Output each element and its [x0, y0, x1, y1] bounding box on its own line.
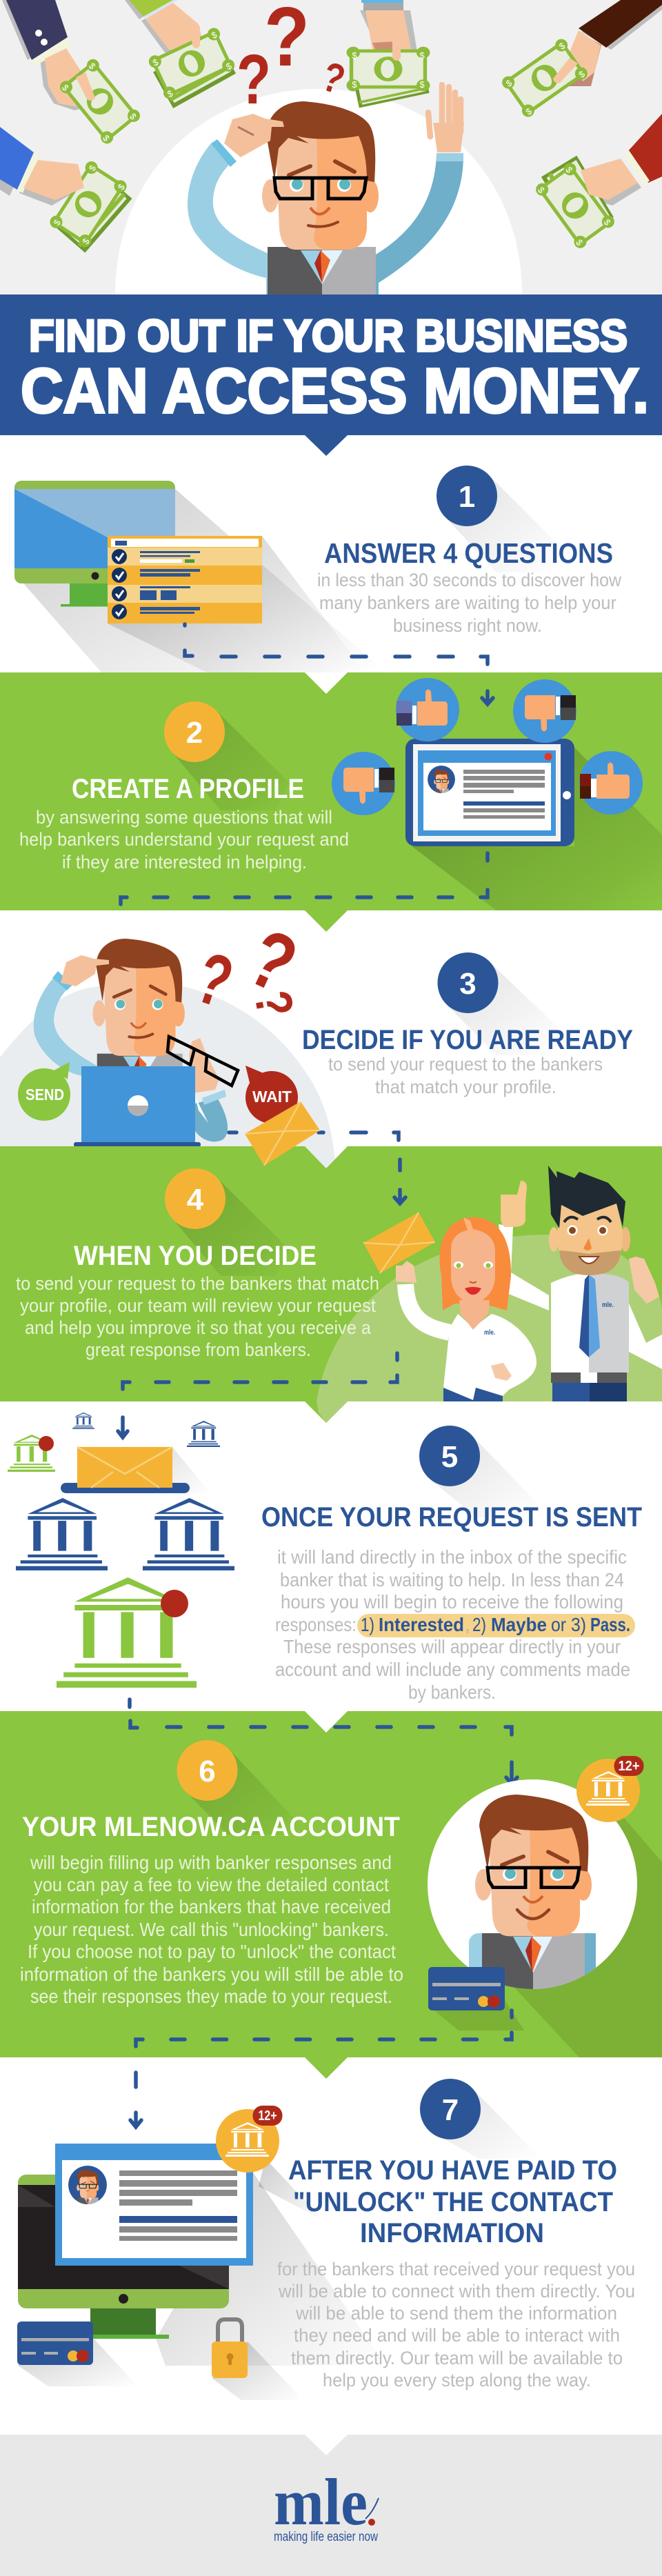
- smile: [579, 1257, 599, 1264]
- body text 7: [277, 2259, 635, 2390]
- icon: thumb up top left: [396, 678, 459, 741]
- body text 2: [19, 807, 349, 872]
- avatar: [428, 766, 455, 795]
- neck: [459, 1300, 490, 1330]
- panel: footer: [0, 2435, 662, 2576]
- body text 5: These responses will appear directly in your: [283, 1636, 621, 1657]
- icon: monitor: [18, 2175, 229, 2339]
- icon: hand top centre with bills: $: [352, 79, 357, 90]
- panel: step 5: [8, 1412, 642, 1707]
- icon: open padlock: [212, 2319, 248, 2378]
- icon: hand top right with bill: [500, 0, 662, 119]
- heading 7: [288, 2155, 617, 2248]
- body text 6: If you choose not to pay to "unlock" the contact: [28, 1941, 396, 1962]
- panel: step 1: [14, 466, 621, 672]
- body text 4: to send your request to the bankers that match: [16, 1273, 379, 1294]
- icon: hand top with bills: $: [151, 57, 161, 68]
- man at laptop: [34, 939, 238, 1147]
- highlighted responses: ,: [465, 1614, 470, 1635]
- icon: question marks: ?: [235, 912, 310, 1011]
- hands: [396, 1261, 417, 1283]
- dashed connector top: [130, 1721, 517, 1784]
- icon: hand top centre with bills: $: [419, 50, 425, 61]
- icon: hand top right with bill: $: [576, 68, 588, 80]
- number badge 7: [420, 2079, 541, 2159]
- icon: question marks: ?: [243, 986, 305, 1021]
- panel: step 7: [17, 2073, 635, 2400]
- icon: hand right with bills: $: [574, 237, 585, 248]
- bank badge: [576, 1756, 644, 1822]
- title: FIND OUT IF YOUR BUSINESS: [29, 310, 628, 361]
- icon: tablet profile: [405, 739, 574, 846]
- panel: step 6: [0, 1711, 662, 2079]
- icon: hand top with bills: [125, 0, 241, 110]
- body text 1: many bankers are waiting to help your: [319, 592, 616, 613]
- highlighted responses: 1): [361, 1614, 374, 1635]
- avatar: [68, 2166, 107, 2206]
- body text 5: banker that is waiting to help. In less than 24: [280, 1569, 624, 1590]
- body text 3: to send your request to the bankers: [328, 1054, 603, 1075]
- torso: [97, 1054, 183, 1091]
- number badge 1: [437, 466, 559, 572]
- body text 6: your request. We call this "unlocking" bankers.: [34, 1919, 389, 1940]
- icon: hand right with bills: $: [563, 165, 575, 175]
- body text 6: [20, 1852, 403, 2007]
- body text 5: hours you will begin to receive the following: [281, 1591, 623, 1613]
- shirt: [443, 1314, 536, 1400]
- highlighted responses: Interested: [379, 1614, 464, 1635]
- body text 6: information of the bankers you will still be able to: [20, 1964, 403, 1985]
- left arm: [34, 974, 97, 1076]
- highlighted responses: Maybe: [491, 1614, 547, 1635]
- SEND bubble: SEND: [26, 1086, 64, 1104]
- long shadows: [23, 489, 386, 672]
- raised arm: [499, 1224, 549, 1310]
- icon: hand top left with bill: $: [128, 111, 139, 122]
- dashed connector: [229, 1132, 399, 1140]
- body text 3: that match your profile.: [375, 1077, 556, 1097]
- icon: thumb down left: [332, 752, 395, 815]
- long shadows: [17, 2159, 386, 2400]
- icon: hand top right with bill: $: [523, 106, 534, 117]
- body text 7: they need and will be able to interact with: [294, 2325, 620, 2346]
- body text 4: your profile, our team will review your request: [20, 1295, 376, 1316]
- icon: question marks: [237, 0, 350, 119]
- icon: hand right with bills: $: [601, 217, 613, 228]
- number badge 2: 2: [186, 716, 203, 750]
- eyes: [567, 1225, 578, 1236]
- icon: hand left with bills: $: [51, 217, 63, 228]
- heading 6: YOUR MLENOW.CA ACCOUNT: [22, 1812, 400, 1842]
- number badge 3: [437, 952, 559, 1055]
- heading 7: "UNLOCK" THE CONTACT: [293, 2187, 613, 2217]
- icon: question marks: ?: [237, 40, 271, 119]
- body text 7: help you every step along the way.: [323, 2370, 591, 2390]
- icon: hand right with bills: [531, 114, 662, 250]
- icon: hand top left with bill: $: [60, 83, 71, 93]
- body text 2: help bankers understand your request and: [19, 829, 349, 850]
- icon: envelope held by woman: [363, 1212, 435, 1273]
- icon: hand left with bills: $: [80, 236, 92, 246]
- tablet shadow: [412, 748, 662, 910]
- logo: mle: [274, 2465, 368, 2539]
- man: head: [262, 101, 379, 250]
- number badge 2: [164, 701, 290, 810]
- body text 7: will be able to connect with them directly. You: [278, 2281, 635, 2302]
- portrait circle: [428, 1779, 637, 1995]
- icon: hand left with bills: $: [87, 163, 99, 173]
- body text 5: account and will include any comments made: [275, 1659, 630, 1680]
- arrow into envelope: [118, 1417, 128, 1437]
- icon: hand top left with bill: $: [101, 133, 112, 143]
- tie: [579, 1275, 589, 1357]
- face: [557, 1204, 623, 1275]
- icon: hand right with bills: $: [536, 185, 548, 196]
- icon: thumb up right: [579, 751, 643, 815]
- icon: hand left with bills: [0, 127, 138, 258]
- highlighted responses: [357, 1614, 635, 1637]
- beard: [559, 1250, 621, 1275]
- SEND bubble: [18, 1062, 70, 1121]
- body text 6: information for the bankers that have received: [32, 1896, 391, 1917]
- icon: hand top centre with bills: [347, 0, 430, 108]
- panel: step 4: [0, 1101, 662, 1423]
- number badge 1: 1: [459, 480, 475, 514]
- logo: making life easier now: [274, 2530, 378, 2544]
- man: arms: [188, 139, 463, 294]
- icon: hand top with bills: $: [210, 29, 219, 41]
- belt and trousers: [551, 1372, 627, 1383]
- body text 6: see their responses they made to your request.: [30, 1986, 392, 2007]
- body text 5: by bankers.: [408, 1681, 496, 1703]
- man: hands: [224, 85, 464, 157]
- dashed connector: [123, 1353, 397, 1389]
- icon: large blue bank left: [16, 1498, 108, 1570]
- face: [451, 1229, 495, 1304]
- shirt logo: mle.: [602, 1301, 614, 1309]
- panel: step 2: [0, 672, 662, 932]
- heading 7: INFORMATION: [360, 2218, 544, 2248]
- icon: credit card: [428, 1967, 505, 2010]
- icon: hand top right with bill: $: [557, 40, 568, 52]
- icon: laptop: [74, 1066, 201, 1147]
- body text 2: by answering some questions that will: [36, 807, 332, 828]
- right arm: [195, 1098, 228, 1141]
- number badge 7: 7: [442, 2093, 459, 2127]
- 12+ badge: 12+: [258, 2108, 277, 2124]
- woman with envelope: [396, 1217, 536, 1401]
- number badge 4: [165, 1168, 290, 1276]
- shirt logo: mle.: [484, 1329, 495, 1337]
- man with thumb up: [499, 1166, 662, 1401]
- body text 5: responses:: [275, 1614, 357, 1635]
- icon: small green bank with alert: [8, 1435, 55, 1472]
- icon: small blue bank right: [187, 1421, 220, 1447]
- dashed arrow: [394, 1159, 405, 1204]
- white dome behind man: [115, 89, 522, 294]
- connector stub: [128, 1699, 132, 1707]
- heading 7: AFTER YOU HAVE PAID TO: [288, 2155, 617, 2186]
- hair: [439, 1217, 511, 1310]
- body text 2: if they are interested in helping.: [62, 852, 307, 872]
- number badge 3: 3: [459, 967, 477, 1001]
- icon: small blue bank: [72, 1412, 94, 1429]
- title: [21, 310, 649, 426]
- body text 4: and help you improve it so that you receive a: [25, 1317, 372, 1338]
- body text 3: [328, 1054, 603, 1097]
- dashed connector with arrow: [121, 691, 493, 904]
- light green dome: [317, 1235, 662, 1423]
- hair: [548, 1166, 625, 1228]
- icon: question marks: ?: [187, 937, 242, 1024]
- icon: hand top centre with bills: $: [419, 79, 425, 90]
- icon: hand top left with bill: $: [87, 61, 98, 72]
- WAIT bubble: WAIT: [252, 1088, 292, 1106]
- icon: glasses in hand: [168, 1037, 238, 1086]
- body: [551, 1273, 589, 1372]
- icon: hand top with bills: $: [224, 61, 234, 72]
- head: [92, 939, 185, 1056]
- thumb hand: [501, 1181, 527, 1227]
- icon: checklist form: [108, 536, 262, 623]
- number badge 6: 6: [199, 1755, 216, 1788]
- icon: question marks: [187, 912, 310, 1024]
- highlighted responses: or 3): [551, 1614, 586, 1635]
- left hand: [61, 955, 109, 986]
- body text 7: will be able to send them the information: [295, 2303, 617, 2324]
- icon: monitor: [14, 481, 175, 607]
- sliding envelope from step 3: [245, 1101, 320, 1166]
- body text 4: [16, 1273, 379, 1360]
- far hand: [629, 1257, 659, 1304]
- raised arm: [405, 1284, 450, 1332]
- right hand: [189, 1038, 219, 1093]
- heading 1: ANSWER 4 QUESTIONS: [324, 537, 613, 569]
- man: torso: [268, 247, 376, 294]
- grey dome: [0, 980, 336, 1172]
- icon: thumb down top right: [513, 679, 576, 743]
- icon: envelope on tray: [61, 1447, 210, 1493]
- icon: hand top centre with bills: $: [352, 50, 357, 61]
- WAIT bubble: [245, 1066, 298, 1124]
- icon: large green bank with alert: [57, 1577, 197, 1688]
- icon: hand left with bills: $: [116, 181, 127, 192]
- heading 2: CREATE A PROFILE: [72, 774, 304, 804]
- bank badge: [216, 2106, 283, 2173]
- body text 6: will begin filling up with banker responses and: [30, 1852, 392, 1873]
- icon: large blue bank right: [143, 1498, 234, 1570]
- dashed connector: [185, 624, 488, 664]
- far arm: [629, 1304, 662, 1369]
- panel: step 3: [0, 912, 633, 1172]
- 12+ badge: 12+: [618, 1759, 640, 1774]
- dashed arrow: [130, 2073, 141, 2127]
- highlighted responses: Pass.: [590, 1614, 630, 1635]
- body text 7: them directly. Our team will be available to: [291, 2348, 623, 2368]
- ears: [549, 1227, 559, 1252]
- panel: title banner: [0, 294, 662, 456]
- highlighted responses: 2): [472, 1614, 486, 1635]
- icon: question marks: ?: [317, 53, 350, 103]
- number badge 6: [177, 1740, 297, 1835]
- icon: hand top with bills: $: [166, 88, 175, 99]
- body text 6: you can pay a fee to view the detailed contact: [34, 1874, 389, 1895]
- dashed connector bottom: [136, 2010, 512, 2046]
- number badge 5: 5: [441, 1440, 458, 1474]
- icon: hand top left with bill: [2, 0, 143, 146]
- heading 4: WHEN YOU DECIDE: [74, 1241, 317, 1271]
- icon: profile window: [55, 2144, 253, 2266]
- body text 4: great response from bankers.: [86, 1339, 311, 1360]
- body text 1: [317, 570, 621, 636]
- body text 7: for the bankers that received your request you: [277, 2259, 635, 2279]
- body text 1: in less than 30 seconds to discover how: [317, 570, 621, 590]
- icon: credit card: [17, 2322, 93, 2365]
- long shadows: [434, 1814, 662, 2057]
- pants: [443, 1386, 503, 1401]
- icon: hand top right with bill: $: [504, 77, 514, 89]
- body text 5: it will land directly in the inbox of the specific: [277, 1546, 627, 1568]
- panel: hero illustration: [0, 0, 662, 294]
- body text 5: [275, 1546, 630, 1703]
- body text 1: business right now.: [393, 615, 542, 636]
- number badge 5: [419, 1426, 538, 1517]
- number badge 4: 4: [187, 1183, 204, 1217]
